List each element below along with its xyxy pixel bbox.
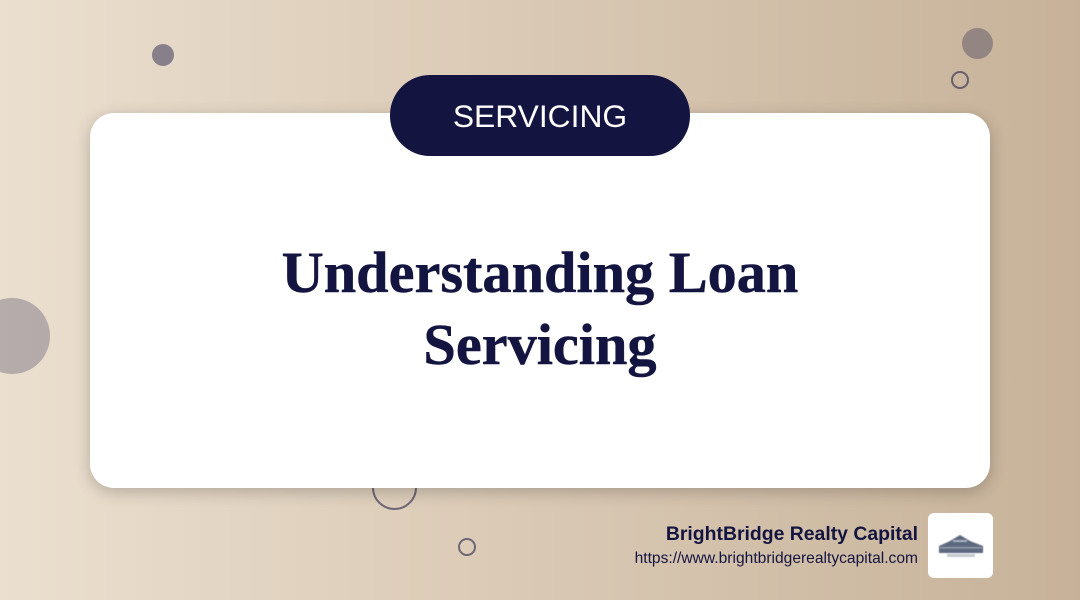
logo tile xyxy=(928,513,993,578)
icon: roof logo xyxy=(938,534,984,558)
decorative circle: ring behind card xyxy=(372,465,417,510)
website url: https://www.brightbridgerealtycapital.com xyxy=(635,550,918,567)
decorative circle: left large xyxy=(0,298,50,374)
decorative circle: top right ring xyxy=(951,71,969,89)
decorative circle: top right filled xyxy=(962,28,993,59)
footer: brand text xyxy=(635,523,918,567)
badge: servicing: SERVICING xyxy=(453,98,627,134)
title: Understanding Loan Servicing xyxy=(282,240,798,376)
panel: white card xyxy=(90,113,990,488)
company name: BrightBridge Realty Capital xyxy=(666,523,918,545)
badge: servicing xyxy=(390,75,690,156)
decorative circle: top left xyxy=(152,44,174,66)
decorative circle: bottom ring xyxy=(458,538,476,556)
